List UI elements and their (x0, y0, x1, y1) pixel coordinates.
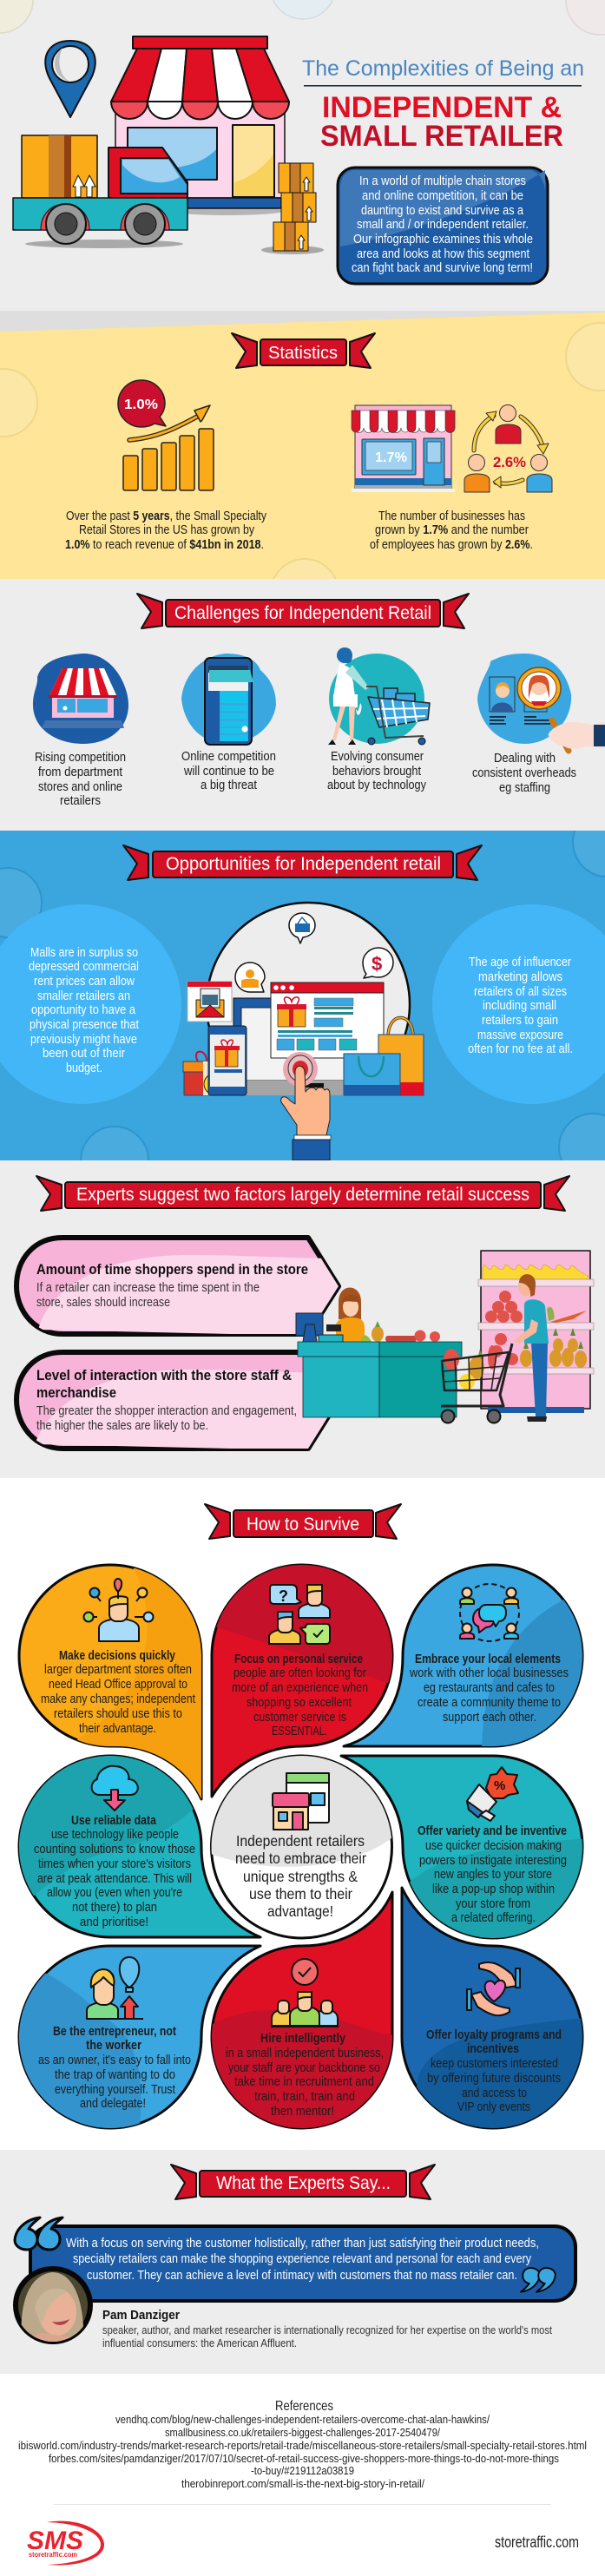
text: entrepreneur: the trap of wanting to do (55, 2068, 175, 2082)
heading ribbon: opportunities: Opportunities for Independent retail (166, 854, 441, 874)
text: challenge 3: about by technology (327, 779, 427, 792)
website url: storetraffic.com (495, 2533, 579, 2551)
quote box: specialty retailers can make the shopping experience relevant and personal for each and every (73, 2252, 532, 2266)
text: hire (226, 2032, 384, 2119)
text: challenge 2: Online competition (181, 750, 276, 764)
heading ribbon: challenges (137, 594, 469, 628)
text: variety: a related offering. (451, 1911, 536, 1925)
intro text box: In a world of multiple chain stores (359, 174, 526, 188)
text: main message: need to embrace their (235, 1850, 366, 1867)
callout: influencer marketing: The age of influencer (469, 956, 571, 969)
text: personal service: more of an experience when (232, 1681, 368, 1695)
logo: SMS storetraffic: SMS (27, 2527, 83, 2555)
phone (208, 1026, 247, 1095)
references: forbes.com/sites/pamdanziger/2017/07/10/secret-of-retail-success-give-shoppers-more-things-to-do-not-more-things (49, 2453, 559, 2465)
callout: influencer marketing: retailers of all sizes (474, 985, 567, 999)
icon: closing quote mark (521, 2268, 556, 2292)
text: personal service: Focus on personal service (234, 1653, 363, 1666)
text: make decisions quickly: their advantage. (79, 1722, 156, 1736)
callout: time in store (16, 1238, 347, 1337)
panel: what the experts say (0, 2150, 605, 2374)
petal: personal service (208, 1562, 399, 1797)
callout: malls: rent prices can allow (34, 975, 135, 989)
text: main message (235, 1832, 366, 1920)
text: variety: use quicker decision making (425, 1839, 562, 1853)
text: reliable data: use technology like people (51, 1828, 179, 1842)
heading ribbon: opportunities (123, 845, 482, 880)
callout: malls (0, 904, 181, 1104)
icon: email card (187, 982, 232, 1022)
panel: how to survive (17, 1504, 590, 2135)
text: hire: then mentor! (271, 2105, 334, 2119)
text: reliable data (34, 1814, 195, 1929)
text: personal service: people are often looking for (233, 1666, 366, 1680)
icon: staff resumes and magnifier (477, 654, 605, 751)
icon: shop 1.7%: 1.7% (375, 450, 407, 465)
callout: malls: previously might have (30, 1033, 137, 1047)
references (18, 2399, 587, 2490)
callout: time in store: If a retailer can increase the time spent in the (36, 1281, 260, 1295)
text: make decisions quickly (41, 1649, 195, 1736)
title: main heading (320, 91, 563, 153)
icon: service people (269, 1585, 330, 1644)
text: challenge 3 (327, 750, 427, 792)
text: entrepreneur: as an owner, it's easy to fall into (38, 2054, 191, 2067)
text: variety: like a pop-up shop within (432, 1883, 555, 1896)
text: local elements: create a community theme to (418, 1696, 561, 1710)
text: challenge 2: will continue to be (183, 765, 274, 779)
references: smallbusiness.co.uk/retailers-biggest-challenges-2017-2540479/ (165, 2427, 440, 2439)
text: personal service: customer service is (253, 1711, 346, 1725)
callout: malls: physical presence that (30, 1018, 139, 1032)
text: local elements: Embrace your local elements (415, 1653, 561, 1666)
text: entrepreneur: everything yourself. Trust (55, 2083, 175, 2097)
icon: map pin (45, 41, 95, 117)
quote box (30, 2226, 575, 2301)
references: vendhq.com/blog/new-challenges-independent-retailers-overcome-chat-alan-hawkins/ (115, 2414, 490, 2426)
text: statistic 2: of employees has grown by 2.6%. (370, 538, 533, 552)
attribution: influential consumers: the American Affluent. (102, 2336, 297, 2349)
text: loyalty: by offering future discounts (427, 2072, 561, 2086)
callout: malls: Malls are in surplus so (30, 946, 138, 960)
text: loyalty (426, 2028, 562, 2114)
text: loyalty: keep customers interested (431, 2057, 558, 2071)
intro text box: and online competition, it can be (362, 189, 523, 203)
gift and coins (183, 1052, 235, 1095)
callout: interaction: The greater the shopper interaction and engagement, (36, 1404, 297, 1418)
callout: influencer marketing: massive exposure (477, 1028, 563, 1042)
petal: reliable data (17, 1753, 260, 1937)
text: make decisions quickly: larger department stores often (44, 1663, 192, 1677)
callout: influencer marketing (432, 904, 605, 1104)
text: make decisions quickly: need Head Office approval to (49, 1678, 187, 1692)
text: entrepreneur: and delegate! (80, 2097, 146, 2111)
text: local elements: work with other local businesses (409, 1666, 569, 1680)
heading ribbon: how to survive (205, 1504, 401, 1539)
text: personal service (232, 1653, 368, 1738)
text: challenge 4: eg staffing (499, 781, 550, 795)
shopping bags (344, 1017, 424, 1095)
chart: growth bars 1.0% (118, 380, 214, 490)
text: loyalty: incentives (467, 2042, 519, 2056)
text: make decisions quickly: Make decisions quickly (59, 1649, 175, 1663)
heading ribbon: challenges: Challenges for Independent Retail (174, 603, 431, 623)
icon: basket bubble (289, 913, 315, 943)
icon: megaphone offer (467, 1767, 518, 1821)
icon: person bubble (235, 963, 265, 992)
text: hire: take time in recruitment and (234, 2075, 374, 2089)
text: personal service: ESSENTIAL. (272, 1725, 327, 1738)
icon: shop 1.7% (352, 405, 455, 492)
text: challenge 2 (181, 750, 276, 792)
icon: pressing hand (281, 1052, 331, 1160)
text: challenge 1: Rising competition (35, 751, 126, 765)
laptop (205, 998, 345, 1095)
text: reliable data: times when your store's visitors (38, 1857, 191, 1871)
references: -to-buy/#219112a03819 (251, 2465, 354, 2477)
centre oval: main message (208, 1753, 399, 1938)
logo: SMS storetraffic: storetraffic.com (29, 2551, 77, 2559)
text: hire: Hire intelligently (260, 2032, 345, 2046)
icon: megaphone offer: % (494, 1778, 505, 1793)
callout: malls: opportunity to have a (31, 1003, 136, 1017)
title: main heading: INDEPENDENT & (322, 91, 562, 124)
text: variety (418, 1824, 567, 1925)
icon: entrepreneur idea (86, 1957, 143, 2019)
text: reliable data: not there) to plan (72, 1901, 157, 1915)
heading ribbon: Statistics: Statistics (268, 344, 338, 363)
icon: cloud download (92, 1766, 138, 1810)
icon: team and check (271, 1959, 339, 2027)
heading ribbon: experts say (171, 2165, 435, 2199)
icon: shop on dark blob (33, 654, 128, 744)
callout: interaction (16, 1352, 347, 1451)
heading ribbon: how to survive: How to Survive (247, 1515, 359, 1534)
text: statistic 2 (370, 509, 533, 552)
text: challenge 1: stores and online (38, 780, 122, 794)
petal: loyalty (402, 1888, 586, 2135)
references: References (275, 2399, 333, 2414)
text: reliable data: Use reliable data (71, 1814, 157, 1828)
chart: growth bars 1.0%: 1.0% (124, 398, 158, 412)
illustration: store shelf (478, 1251, 594, 1413)
callout: interaction: Level of interaction with the store staff & (36, 1368, 292, 1383)
text: hire: train, train, train and (254, 2090, 355, 2104)
text: statistic 1: Over the past 5 years, the Small Specialty (66, 509, 267, 523)
text: personal service: shopping so excellent (247, 1696, 352, 1710)
callout: malls: been out of their (43, 1047, 125, 1061)
text: reliable data: are at peak attendance. This will (37, 1872, 192, 1886)
text: challenge 1: from department (38, 766, 122, 779)
illustration: counter and cashier (296, 1288, 462, 1417)
text: local elements: support each other. (443, 1711, 536, 1725)
heading ribbon: experts suggest (36, 1176, 569, 1211)
illustration: shopper and cart (441, 1274, 549, 1423)
text: entrepreneur: the worker (86, 2039, 141, 2053)
text: loyalty: and access to (462, 2086, 527, 2100)
icon: decision person (83, 1579, 153, 1641)
text: reliable data: counting solutions to know those (34, 1843, 195, 1856)
text: variety: powers to instigate interesting (419, 1854, 567, 1868)
intro text box: daunting to exist and survive as a (361, 204, 524, 218)
icon: employees cycle 2.6% (464, 404, 552, 492)
text: variety: new angles to your store (434, 1868, 552, 1882)
icon: dollar bubble (363, 948, 393, 978)
panel: challenges (0, 579, 605, 831)
callout: interaction: the higher the sales are likely to be. (36, 1419, 208, 1433)
petal: variety (341, 1756, 590, 1944)
text: challenge 4: consistent overheads (472, 766, 576, 780)
intro text box (338, 168, 548, 284)
callout: influencer marketing: often for no fee at all. (468, 1042, 573, 1056)
text: main message: use them to their (249, 1885, 352, 1902)
quote box: With a focus on serving the customer holistically, rather than just satisfying their product needs, (66, 2237, 539, 2251)
panel: success factors (0, 1160, 605, 1478)
panel: opportunities (0, 831, 605, 1160)
text: challenge 1: retailers (60, 794, 101, 808)
callout: influencer marketing: marketing allows (478, 970, 562, 984)
petal: local elements (344, 1565, 590, 1753)
text: statistic 2: The number of businesses has (378, 509, 525, 523)
intro text box: can fight back and survive long term! (352, 261, 533, 275)
text: variety: Offer variety and be inventive (418, 1824, 567, 1838)
text: hire: in a small independent business, (226, 2047, 384, 2060)
title: main heading: SMALL RETAILER (320, 120, 563, 153)
panel: statistics (0, 311, 605, 579)
callout: malls: budget. (66, 1061, 102, 1075)
icon: community (460, 1584, 519, 1641)
title: subtitle: The Complexities of Being an (302, 56, 584, 81)
illustration: online shopping (183, 903, 424, 1160)
intro text box: area and looks at how this segment (357, 247, 529, 261)
text: statistic 1: Retail Stores in the US has grown by (79, 523, 255, 537)
logo: SMS storetraffic (27, 2521, 104, 2566)
intro text box: Our infographic examines this whole (353, 233, 533, 246)
text: statistic 2: grown by 1.7% and the number (375, 523, 529, 537)
text: loyalty: VIP only events (457, 2100, 530, 2114)
petal: make decisions quickly (19, 1562, 208, 1805)
text: local elements: eg restaurants and cafes to (424, 1681, 555, 1695)
callout: malls: smaller retailers an (37, 989, 130, 1003)
text: statistic 1: 1.0% to reach revenue of $41bn in 2018. (65, 538, 264, 552)
attribution: Pam Danziger (102, 2308, 180, 2323)
text: reliable data: and prioritise! (80, 1916, 148, 1929)
text: challenge 3: behaviors brought (332, 765, 421, 779)
callout: influencer marketing: including small (483, 999, 556, 1013)
callout: malls: depressed commercial (29, 960, 139, 974)
petal: entrepreneur (17, 1946, 260, 2131)
icon: employees cycle 2.6%: 2.6% (493, 454, 526, 470)
icon: dollar bubble: $ (372, 953, 382, 975)
panel: header (0, 0, 605, 311)
references: therobinreport.com/small-is-the-next-big-story-in-retail/ (181, 2478, 424, 2490)
text: main message: advantage! (267, 1902, 333, 1920)
icon: shopper with cart (328, 647, 430, 745)
text: challenge 4: Dealing with (494, 752, 556, 766)
text: make decisions quickly: make any changes; independent (41, 1692, 195, 1706)
text: reliable data: allow you (even when you're (47, 1886, 182, 1900)
browser window (271, 982, 384, 1058)
heading ribbon: experts suggest: Experts suggest two factors largely determine retail success (76, 1185, 529, 1205)
icon: online store phone (181, 654, 276, 745)
text: entrepreneur (38, 2025, 191, 2111)
text: challenge 4 (472, 752, 576, 795)
icon: delivery truck (13, 135, 187, 248)
text: challenge 2: a big threat (201, 779, 257, 792)
attribution (102, 2308, 552, 2349)
text: statistic 1 (65, 509, 267, 552)
icon: shop front (111, 36, 289, 215)
callout: interaction: merchandise (36, 1385, 116, 1401)
text: challenge 3: Evolving consumer (331, 750, 424, 764)
text: main message: unique strengths & (243, 1868, 358, 1885)
callout: time in store: store, sales should increase (36, 1296, 170, 1310)
text: loyalty: Offer loyalty programs and (426, 2028, 562, 2042)
heading ribbon: Statistics (232, 333, 375, 368)
icon: service people: ? (279, 1587, 288, 1605)
text: entrepreneur: Be the entrepreneur, not (53, 2025, 176, 2039)
icon: caring hands (467, 1962, 520, 2015)
text: hire: your staff are your backbone so (228, 2061, 380, 2075)
icon: opening quote mark (15, 2218, 62, 2250)
quote box: customer. They can achieve a level of intimacy with customers that no mass retailer can. (87, 2269, 517, 2283)
heading ribbon: experts say: What the Experts Say... (216, 2173, 391, 2193)
callout: influencer marketing: retailers to gain (482, 1014, 558, 1028)
text: challenge 1 (35, 751, 126, 808)
icon: stacked parcels (261, 163, 324, 254)
petal: hire (208, 1892, 399, 2135)
icon: store and web page (273, 1773, 329, 1830)
text: local elements (409, 1653, 569, 1725)
text: variety: your store from (456, 1897, 530, 1911)
text: make decisions quickly: retailers should use this to (54, 1707, 182, 1721)
photo: Pam Danziger (16, 2269, 90, 2343)
callout: time in store: Amount of time shoppers spend in the store (36, 1262, 308, 1278)
intro text box: small and / or independent retailer. (357, 218, 529, 232)
text: main message: Independent retailers (236, 1832, 365, 1850)
